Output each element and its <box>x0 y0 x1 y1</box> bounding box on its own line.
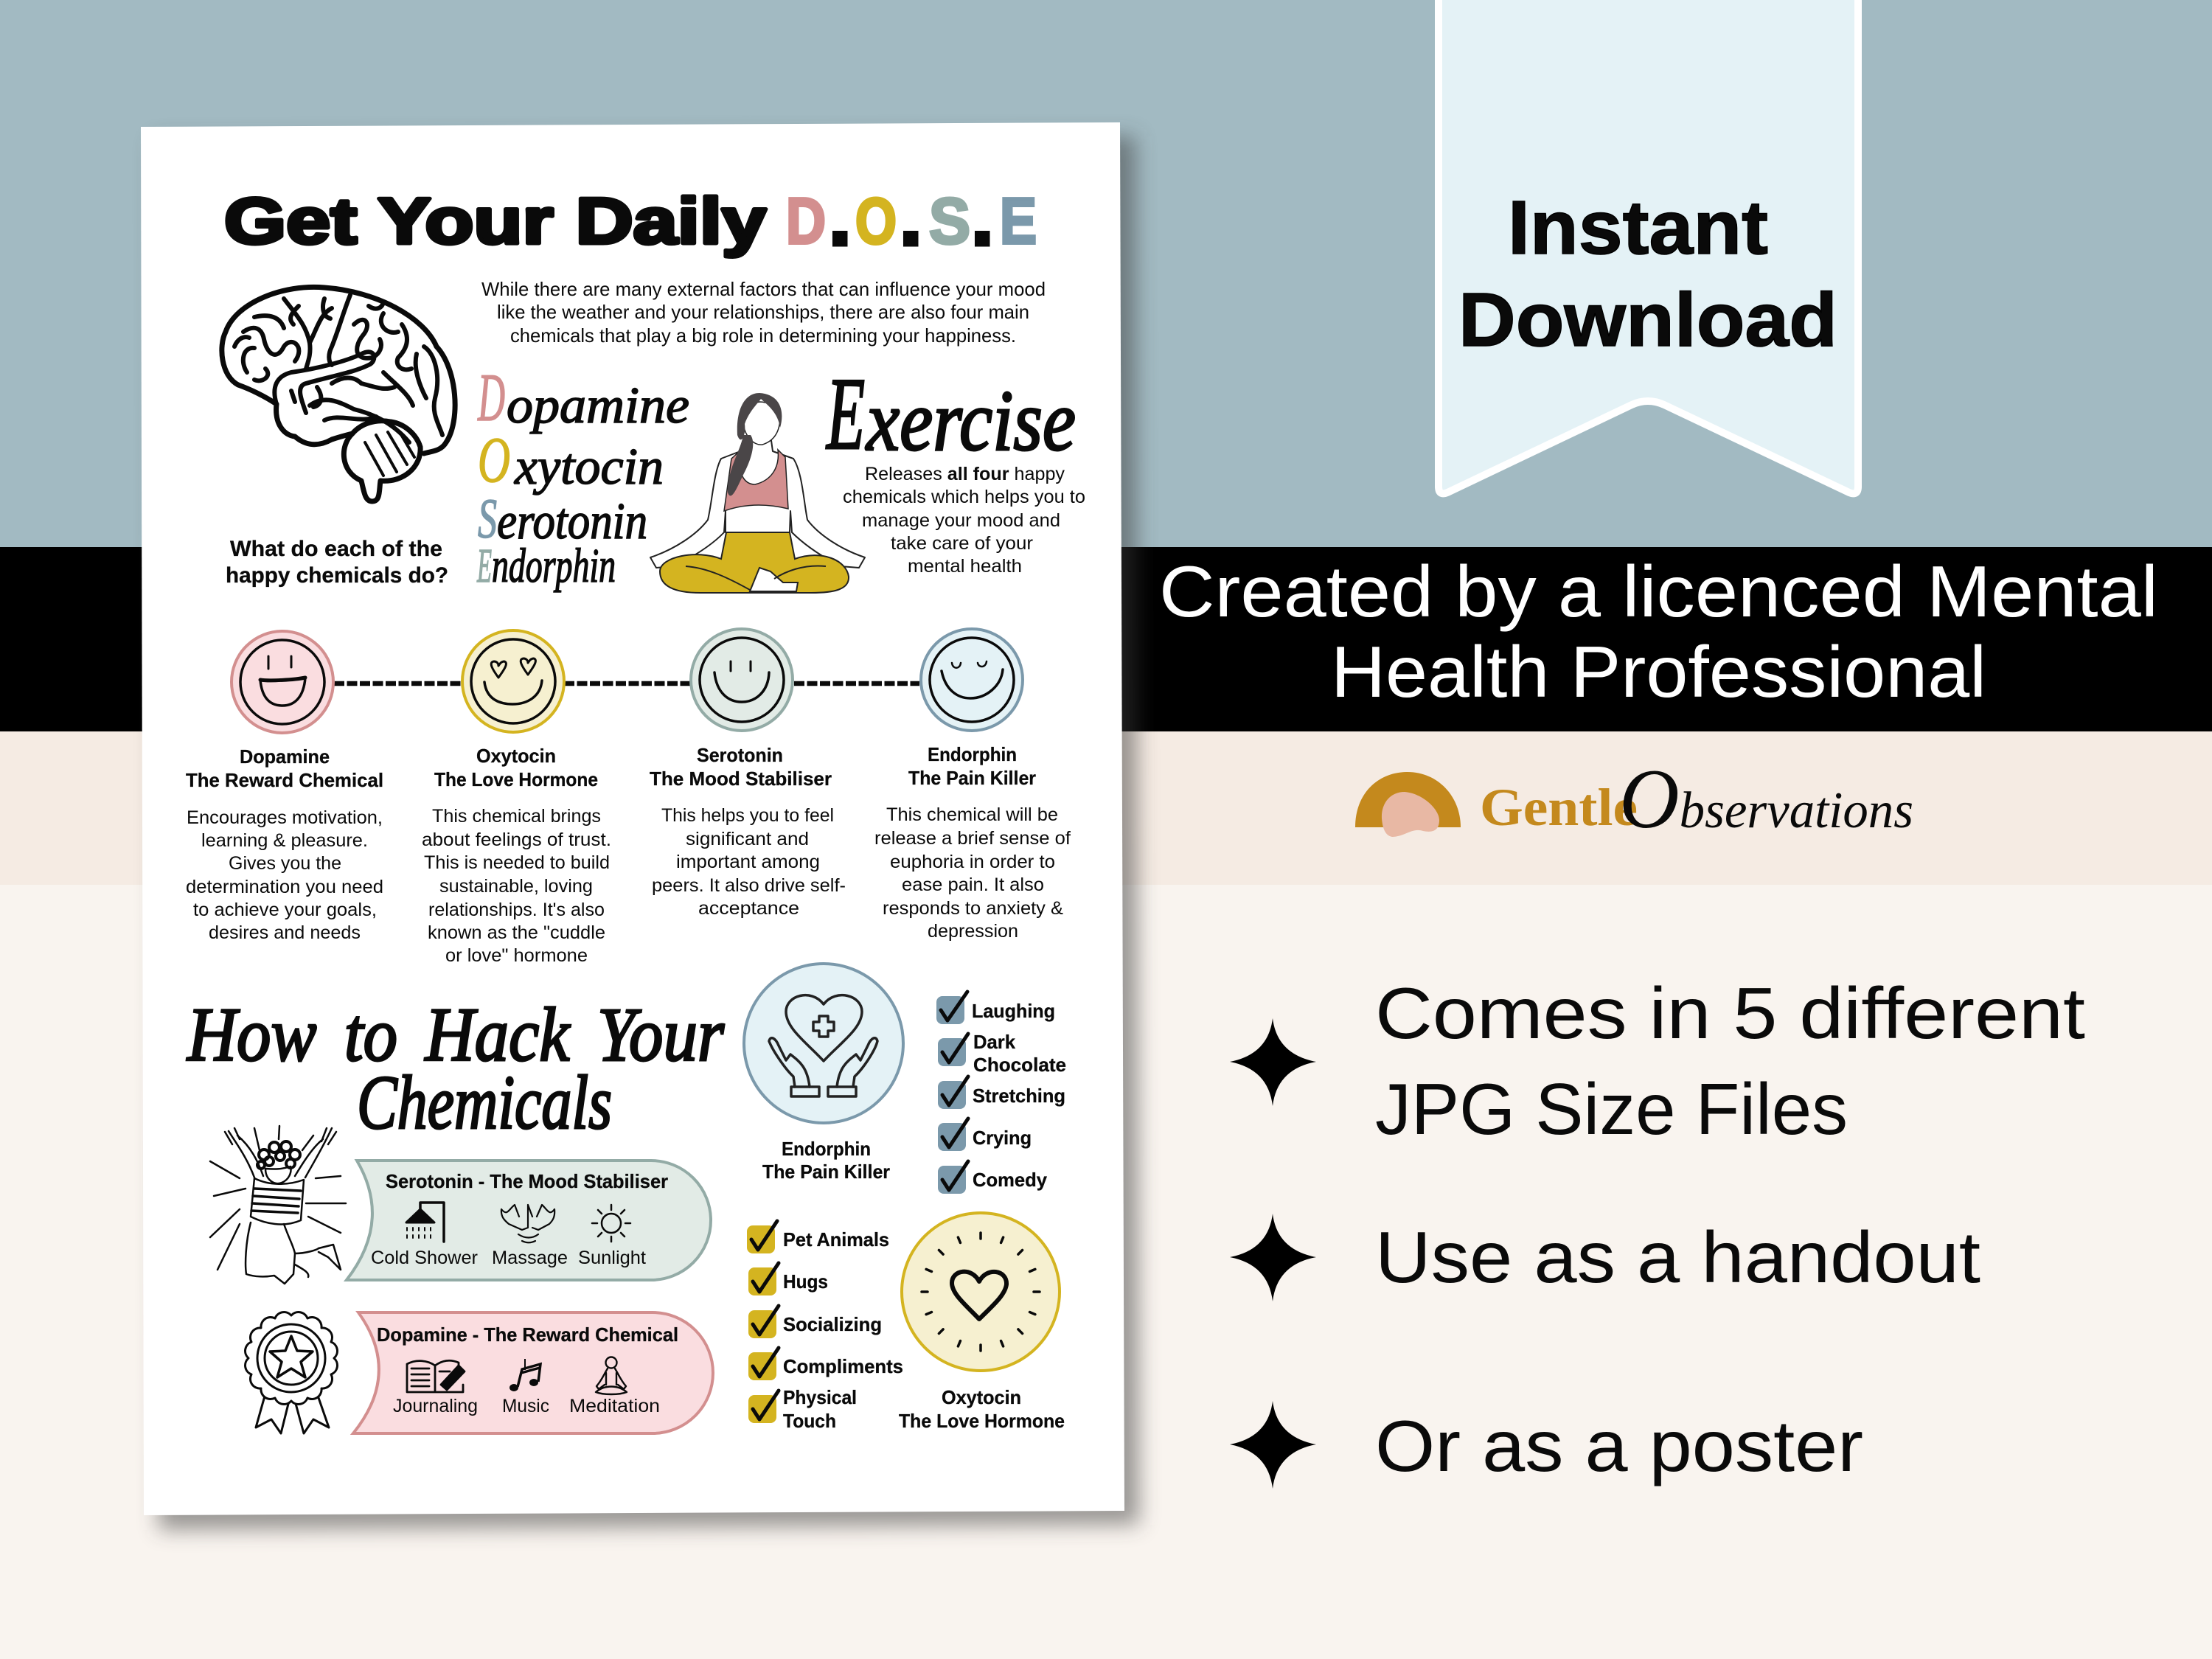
bullet: handout: Use as a handout <box>1375 1217 1980 1298</box>
title: O <box>855 184 897 257</box>
bullet: poster: Or as a poster <box>1375 1405 1863 1486</box>
icon: star <box>1230 1018 1316 1106</box>
heading: how to hack your chemicals: Chemicals <box>357 1060 612 1145</box>
column: dopamine: determination you need <box>186 877 383 897</box>
intro text: like the weather and your relationships, there are also four main <box>497 301 1029 323</box>
column: serotonin <box>650 744 846 919</box>
intro text: chemicals that play a big role in determining your happiness. <box>510 324 1016 347</box>
banner: created by: Created by a licenced Mental <box>1159 551 2158 632</box>
column: dopamine: desires and needs <box>209 922 361 943</box>
label: endorphin: Endorphin <box>782 1138 871 1160</box>
logo: gentle observations: Observations <box>1619 752 1913 846</box>
label: endorphin <box>762 1138 890 1183</box>
panel: serotonin hacks: Sunlight <box>578 1248 646 1268</box>
label: oxytocin <box>899 1386 1065 1432</box>
column: oxytocin: sustainable, loving <box>439 876 593 897</box>
column: dopamine <box>186 745 383 943</box>
icon: star <box>1230 1214 1316 1301</box>
word: dopamine: opamine <box>507 378 689 434</box>
column: dopamine: Gives you the <box>229 853 341 874</box>
column: dopamine: The Reward Chemical <box>186 769 383 791</box>
word: oxytocin <box>478 425 664 496</box>
column: serotonin: important among <box>676 852 820 872</box>
banner: created by: Health Professional <box>1331 631 1986 712</box>
column: serotonin: The Mood Stabiliser <box>650 768 832 790</box>
column: dopamine: Encourages motivation, <box>187 807 383 828</box>
word: oxytocin: xytocin <box>514 439 664 495</box>
question text: What do each of the <box>230 537 442 561</box>
column: oxytocin <box>422 745 611 966</box>
heading: exercise: xercise <box>865 372 1076 469</box>
icon: star <box>1230 1401 1316 1489</box>
word: endorphin: E <box>477 539 492 593</box>
word: serotonin: S <box>478 488 497 550</box>
column: oxytocin: The Love Hormone <box>434 768 598 790</box>
text: exercise description: mental health <box>908 556 1022 577</box>
text: exercise description: Releases all four happy <box>865 464 1065 484</box>
panel: dopamine hacks: Journaling <box>393 1396 478 1416</box>
checklist: oxytocin: Compliments <box>783 1355 903 1377</box>
intro text: While there are many external factors that can influence your mood <box>481 278 1046 300</box>
logo: gentle observations: Gentle <box>1480 778 1638 837</box>
checklist: endorphin <box>936 992 1066 1194</box>
checklist: endorphin: Comedy <box>973 1169 1048 1191</box>
icon: endorphin heart hands <box>744 964 903 1123</box>
panel: serotonin hacks <box>347 1161 711 1280</box>
icon: music notes <box>509 1359 540 1391</box>
word: endorphin: ndorphin <box>492 539 616 593</box>
title <box>224 172 1037 262</box>
checklist: oxytocin: Physical <box>783 1386 857 1408</box>
column: oxytocin: This is needed to build <box>424 852 610 873</box>
checklist: oxytocin: Socializing <box>783 1313 882 1335</box>
logo: gentle observations <box>1355 752 1913 846</box>
column: dopamine: to achieve your goals, <box>193 900 377 920</box>
label: endorphin: The Pain Killer <box>762 1161 890 1183</box>
column: oxytocin: or love" hormone <box>445 945 588 966</box>
checklist: endorphin: Crying <box>973 1127 1032 1149</box>
column: oxytocin: known as the "cuddle <box>428 922 605 943</box>
column: endorphin: euphoria in order to <box>890 852 1055 872</box>
column: serotonin: significant and <box>686 829 809 849</box>
icon: shower <box>406 1203 444 1242</box>
checklist: endorphin: Chocolate <box>973 1054 1066 1076</box>
heading: how to hack your chemicals: How to Hack Your <box>186 992 724 1077</box>
icon: serotonin smiley <box>691 629 793 731</box>
icon: massage hands <box>501 1205 554 1242</box>
checklist: endorphin: Dark <box>973 1031 1016 1053</box>
question text <box>226 537 448 588</box>
word: oxytocin: O <box>478 425 510 496</box>
bullet: 5 sizes: Comes in 5 different <box>1375 973 2085 1054</box>
panel: serotonin hacks: Serotonin - The Mood Stabiliser <box>386 1170 668 1192</box>
column: oxytocin: about feelings of trust. <box>422 830 611 850</box>
text: exercise description <box>843 464 1085 577</box>
girl hair curls <box>257 1141 300 1169</box>
title: . <box>900 172 922 262</box>
column: oxytocin: Oxytocin <box>476 745 556 767</box>
column: endorphin: responds to anxiety & <box>883 898 1063 919</box>
checklist: oxytocin: Hugs <box>783 1270 828 1293</box>
column: endorphin: The Pain Killer <box>908 767 1036 789</box>
panel: serotonin hacks: Cold Shower <box>371 1248 478 1268</box>
panel: dopamine hacks: Dopamine - The Reward Chemical <box>377 1324 678 1346</box>
question text: happy chemicals do? <box>226 563 448 588</box>
text: exercise description: take care of your <box>891 533 1033 554</box>
column: endorphin: Endorphin <box>928 743 1017 765</box>
icon: sun <box>592 1205 630 1242</box>
column: dopamine: Dopamine <box>240 745 330 768</box>
illustration: jumping girl <box>210 1126 346 1284</box>
ribbon: instant download: Instant <box>1508 185 1768 270</box>
column: endorphin: ease pain. It also <box>902 874 1044 895</box>
panel: poster <box>141 122 1124 1515</box>
title: S <box>929 184 970 257</box>
heading: how to hack your chemicals <box>186 992 724 1145</box>
title: . <box>971 172 994 262</box>
icon: award rosette <box>246 1312 337 1433</box>
checklist: oxytocin: Touch <box>783 1410 836 1432</box>
checklist: oxytocin: Pet Animals <box>783 1228 889 1251</box>
word: serotonin: erotonin <box>497 493 647 550</box>
word: dopamine <box>477 360 689 435</box>
word list: DOSE <box>477 360 689 593</box>
panel: serotonin hacks: Massage <box>492 1248 568 1268</box>
title: Get Your Daily <box>224 184 766 257</box>
panel: dopamine hacks: Music <box>502 1396 549 1416</box>
text: exercise description: manage your mood and <box>862 510 1060 531</box>
checklist: endorphin: Laughing <box>972 1000 1055 1022</box>
column: endorphin: This chemical will be <box>886 804 1058 825</box>
title: D <box>786 184 826 257</box>
heading: exercise <box>826 357 1076 471</box>
column: serotonin: peers. It also drive self- <box>652 875 846 896</box>
icon: meditation <box>596 1357 627 1394</box>
text: exercise description: chemicals which helps you to <box>843 487 1085 507</box>
bullet: poster <box>1230 1401 1863 1489</box>
banner: created by <box>1159 551 2158 712</box>
column: serotonin: Serotonin <box>697 744 783 766</box>
heading: exercise: E <box>826 357 865 471</box>
illustration: yoga woman <box>650 393 865 593</box>
bullet: handout <box>1230 1214 1980 1301</box>
word: dopamine: D <box>477 360 505 435</box>
intro text <box>481 278 1046 347</box>
dashed connectors <box>334 681 919 686</box>
column: dopamine: learning & pleasure. <box>201 830 368 851</box>
title: E <box>1000 184 1037 257</box>
column: oxytocin: This chemical brings <box>432 806 601 827</box>
bullet: 5 sizes: JPG Size Files <box>1375 1068 1848 1150</box>
icon: oxytocin heart <box>902 1213 1060 1371</box>
icon: journal <box>407 1360 465 1392</box>
ribbon: instant download: Download <box>1458 277 1837 362</box>
ribbon: instant download <box>1439 0 1858 493</box>
icon: dopamine smiley <box>232 631 333 733</box>
panel: dopamine hacks <box>353 1312 713 1433</box>
column: oxytocin: relationships. It's also <box>428 900 605 920</box>
label: oxytocin: Oxytocin <box>942 1386 1021 1408</box>
checklist: oxytocin <box>747 1221 903 1432</box>
column: serotonin: This helps you to feel <box>661 805 834 826</box>
panel: dopamine hacks: Meditation <box>569 1396 660 1416</box>
column: endorphin: release a brief sense of <box>874 828 1071 849</box>
column: serotonin: acceptance <box>698 898 799 919</box>
column: endorphin <box>874 743 1071 942</box>
column: endorphin: depression <box>928 921 1018 942</box>
icon: brain <box>222 287 455 501</box>
icon: oxytocin smiley <box>462 630 564 732</box>
word: endorphin <box>477 539 616 593</box>
title: . <box>829 172 852 262</box>
paper shadow <box>155 136 1139 1530</box>
icon: endorphin smiley <box>921 629 1023 731</box>
bullet: 5 sizes <box>1230 973 2085 1150</box>
checklist: endorphin: Stretching <box>973 1085 1065 1107</box>
label: oxytocin: The Love Hormone <box>899 1410 1065 1432</box>
